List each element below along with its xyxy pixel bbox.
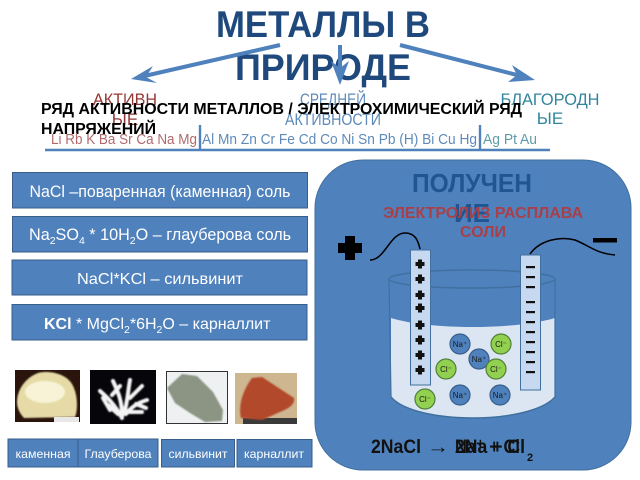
salt box: Glauber's salt: 2 [130, 235, 136, 247]
title: МЕТАЛЛЫ В [216, 4, 430, 45]
heading: activity series: РЯД АКТИВНОСТИ МЕТАЛЛОВ / ЭЛЕКТРОХИМИЧЕСКИЙ РЯД [41, 99, 523, 118]
metal activity series: Ag Pt Au [483, 131, 537, 148]
ions in the melt: Cl⁻ [495, 340, 507, 349]
label button: carnallite: карналлит [244, 447, 305, 461]
salt box: Glauber's salt [12, 216, 308, 252]
label: active metals: АКТИВН [93, 90, 157, 109]
ions in the melt: Na⁺ [453, 340, 467, 349]
panel heading [412, 168, 532, 228]
label button: Glauber's: Глауберова [84, 447, 152, 461]
title [216, 4, 430, 88]
label button: Glauber's [78, 439, 158, 467]
reaction equation: 2NaCl [371, 437, 421, 458]
panel: obtaining by electrolysis [315, 160, 631, 470]
anode electrode [410, 250, 430, 385]
title: ПРИРОДЕ [235, 47, 411, 88]
ions in the melt: Na⁺ [493, 391, 507, 400]
metal activity series: Al Mn Zn Cr Fe Cd Co Ni Sn Pb (H) Bi Cu Hg [202, 131, 477, 148]
reaction equation [371, 437, 533, 464]
icon: big plus [338, 236, 362, 260]
salt box: Glauber's salt: Na [29, 226, 50, 244]
beaker with molten salt [389, 270, 555, 418]
ions in the melt: Cl⁻ [440, 365, 452, 374]
label: active metals: ЫЕ [112, 110, 138, 129]
panel: salts [12, 172, 308, 340]
wire: cathode [530, 239, 615, 255]
electrolysis caption: СОЛИ [460, 224, 506, 241]
ions in the melt: Cl⁻ [419, 395, 431, 404]
cathode electrode [520, 255, 540, 390]
photo: carnallite [235, 373, 297, 424]
label: noble metals: ЫЕ [537, 109, 563, 128]
salt box: halite: NaCl –поваренная (каменная) соль [30, 183, 290, 201]
salt box: sylvinite [12, 260, 307, 295]
photo: Glauber's salt [90, 370, 156, 424]
salt box: Glauber's salt: * 10H [85, 226, 130, 244]
label: medium activity metals: СРЕДНЕЙ [300, 90, 366, 109]
reaction equation: 2 [527, 452, 533, 464]
salt box: carnallite: KCl * MgCl [44, 316, 124, 333]
label: active metals [93, 90, 157, 129]
label button: sylvinite: сильвинит [168, 447, 228, 461]
metal activity series [51, 131, 537, 148]
label button: halite: каменная [16, 447, 70, 461]
label button: halite [8, 439, 78, 467]
icon: big minus [593, 238, 617, 242]
ions in the melt [415, 334, 511, 409]
salt box: carnallite: *6H [130, 316, 157, 333]
arrow: to medium activity metals [331, 45, 349, 85]
arrow: to active metals [131, 45, 280, 83]
electrolysis caption: ЭЛЕКТРОЛИЗ РАСПЛАВА [383, 205, 583, 222]
salt box: Glauber's salt: SO [56, 226, 79, 244]
salt box: sylvinite: NaCl*KCl – сильвинит [77, 271, 244, 288]
photo: sylvinite [166, 372, 228, 424]
heading: activity series [41, 99, 523, 138]
reaction equation: Na⁺ + Cl [455, 437, 520, 458]
label button: carnallite [237, 440, 312, 467]
wire: anode [370, 233, 420, 260]
salt box: halite [12, 172, 308, 208]
photo: halite [15, 370, 80, 422]
salt box: Glauber's salt: 2 [50, 235, 56, 247]
salt box: Glauber's salt: 4 [79, 235, 85, 247]
series axis line [45, 125, 550, 150]
label: noble metals: БЛАГОРОДН [500, 90, 600, 109]
ions in the melt: Cl⁻ [490, 365, 502, 374]
panel heading: ИЕ [454, 198, 490, 228]
salt box: carnallite: 2 [124, 324, 130, 336]
ions in the melt: Na⁺ [472, 355, 486, 364]
reaction equation: 2Na + Cl [455, 437, 525, 458]
reaction equation: → [427, 437, 449, 458]
heading: activity series: НАПРЯЖЕНИЙ [41, 119, 156, 138]
label button: sylvinite [162, 440, 234, 467]
metal activity series: Li Rb K Ba Sr Ca Na Mg [51, 131, 197, 148]
salt box: carnallite [12, 304, 307, 340]
label: noble metals [500, 90, 600, 128]
salt box: Glauber's salt: O – глауберова соль [136, 226, 291, 244]
label: medium activity metals [285, 90, 381, 129]
arrow: to noble metals [400, 45, 535, 82]
electrolysis caption [383, 205, 583, 241]
ions in the melt: Na⁺ [453, 391, 467, 400]
label: medium activity metals: АКТИВНОСТИ [285, 110, 381, 129]
salt box: carnallite: 2 [157, 324, 163, 336]
salt box: carnallite: O – карналлит [162, 316, 271, 333]
panel heading: ПОЛУЧЕН [412, 168, 532, 198]
